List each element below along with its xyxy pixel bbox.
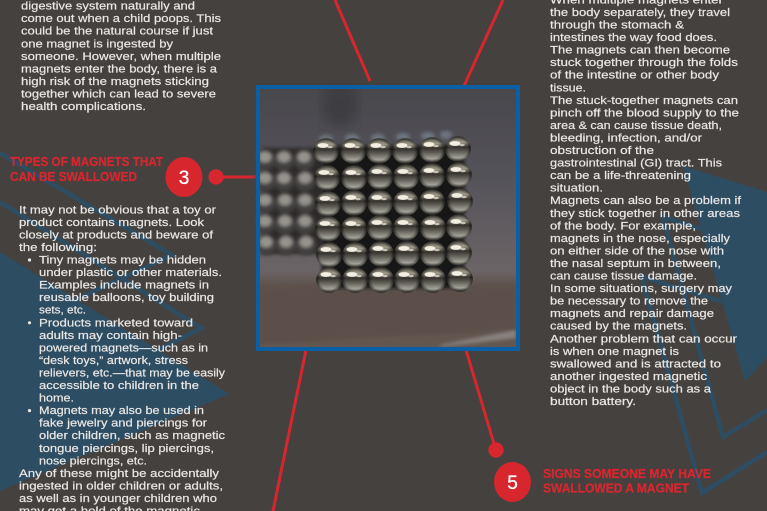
text block: digestive system overview: together which can lead to severe [21,88,216,100]
text block: types of magnets list: sets, etc. [39,305,86,317]
text block: how magnets cause harm: the nasal septum in between, [550,258,721,270]
number badge 5: 5 [507,473,518,494]
text block: digestive system overview: come out when a child poops. This [21,13,222,25]
text block: types of magnets list: adults may contain high- [39,330,182,342]
text block: how magnets cause harm: of the intestine or other body [550,70,720,82]
photo: cube of magnetic spheres [255,83,518,349]
text block: types of magnets list: closely at products and beware of [19,229,214,241]
text block: types of magnets list [19,204,226,511]
text block: how magnets cause harm: obstruction of the [550,145,654,157]
number badge 3 [166,157,202,197]
text block: how magnets cause harm: be necessary to remove the [550,296,708,308]
text block: types of magnets list: older children, such as magnetic [39,430,226,442]
text block: how magnets cause harm: magnets in the nose, especially [550,233,731,245]
text block: types of magnets list: accessible to children in the [39,380,199,392]
text block: how magnets cause harm: the body separately, they travel [550,7,730,19]
text block: types of magnets list: Magnets may also be used in [39,405,204,417]
text block: types of magnets list: reusable balloons, toy building [39,292,214,304]
number badge 3: 3 [179,168,189,189]
heading: types of magnets: TYPES OF MAGNETS THAT [10,155,163,169]
text block: digestive system overview: high risk of the magnets sticking [21,76,209,88]
text block: digestive system overview: someone. However, when multiple [21,51,221,63]
text block: types of magnets list: the following: [19,242,97,254]
decorative blue shapes: right [642,166,767,493]
text block: how magnets cause harm: gastrointestinal (GI) tract. This [550,158,723,170]
number badge 5 [494,462,531,502]
text block: digestive system overview: magnets enter the body, there is a [21,63,218,75]
text block: how magnets cause harm: In some situations, surgery may [550,283,733,295]
connector dot 3 [208,169,224,185]
text block: how magnets cause harm: on either side of the nose with [550,245,724,257]
text block: digestive system overview [21,1,222,113]
text block: types of magnets list: powered magnets—such as in [39,342,208,354]
text block: how magnets cause harm: bleeding, infection, and/or [550,132,702,144]
text block: how magnets cause harm: another ingested magnetic [550,371,708,383]
text block: how magnets cause harm: intestines the way food does. [550,32,717,44]
text block: types of magnets list: nose piercings, etc. [39,455,147,467]
heading: signs of swallowing [543,467,711,496]
text block: how magnets cause harm: of the body. For example, [550,220,696,232]
text block: how magnets cause harm: magnets and repair damage [550,308,714,320]
decorative blue shapes: left [0,153,229,491]
text block: how magnets cause harm: is when one magnet is [550,346,680,358]
text block: types of magnets list: ingested in older children or adults, [19,480,223,492]
connector dot 5 [488,442,504,458]
text block: how magnets cause harm: area & can cause tissue death, [550,120,722,132]
text block: how magnets cause harm: swallowed and is attracted to [550,358,721,370]
text block: types of magnets list: as well as in younger children who [19,493,217,505]
text block: how magnets cause harm: through the stomach & [550,20,685,32]
text block: types of magnets list: “desk toys,” artwork, stress [39,355,189,367]
text block: types of magnets list: under plastic or other materials. [39,267,222,279]
text block: how magnets cause harm: pinch off the blood supply to the [550,107,739,119]
text block: how magnets cause harm: stuck together through the folds [550,57,739,69]
heading: types of magnets: CAN BE SWALLOWED [10,170,137,184]
text block: how magnets cause harm: caused by the magnets. [550,321,687,333]
text block: digestive system overview: one magnet is ingested by [21,38,174,50]
text block: types of magnets list: Examples include magnets in [39,280,209,292]
text block: how magnets cause harm: tissue. [550,82,586,94]
text block: how magnets cause harm: object in the body such as a [550,384,712,396]
text block: how magnets cause harm [550,0,742,408]
heading: types of magnets [10,155,163,184]
heading: signs of swallowing: SWALLOWED A MAGNET [543,482,689,496]
text block: how magnets cause harm: can be a life-threatening [550,170,691,182]
text block: types of magnets list: home. [39,393,74,405]
text block: how magnets cause harm: Another problem that can occur [550,333,737,345]
heading: signs of swallowing: SIGNS SOMEONE MAY HAVE [543,467,711,481]
text block: types of magnets list: fake jewelry and piercings for [39,418,207,430]
text block: types of magnets list: relievers, etc.—that may be easily [39,368,226,380]
connector lines [216,0,503,511]
text block: types of magnets list: Tiny magnets may be hidden [39,254,206,266]
text block: how magnets cause harm: button battery. [550,396,636,408]
text block: how magnets cause harm: can cause tissue damage. [550,270,697,282]
text block: how magnets cause harm: situation. [550,183,603,195]
text block: types of magnets list: Products marketed toward [39,317,193,329]
text block: types of magnets list: tongue piercings, lip piercings, [39,443,214,455]
text block: how magnets cause harm: Magnets can also be a problem if [550,195,742,207]
text block: types of magnets list: product contains magnets. Look [19,217,205,229]
text block: how magnets cause harm: The stuck-together magnets can [550,95,738,107]
text block: digestive system overview: health complications. [21,101,146,113]
text block: digestive system overview: digestive system naturally and [21,1,195,13]
text block: types of magnets list: It may not be obvious that a toy or [19,204,216,216]
text block: how magnets cause harm: The magnets can then become [550,45,730,57]
text block: digestive system overview: could be the natural course if just [21,26,213,38]
text block: types of magnets list: Any of these might be accidentally [19,468,220,480]
text block: how magnets cause harm: they stick together in other areas [550,208,741,220]
